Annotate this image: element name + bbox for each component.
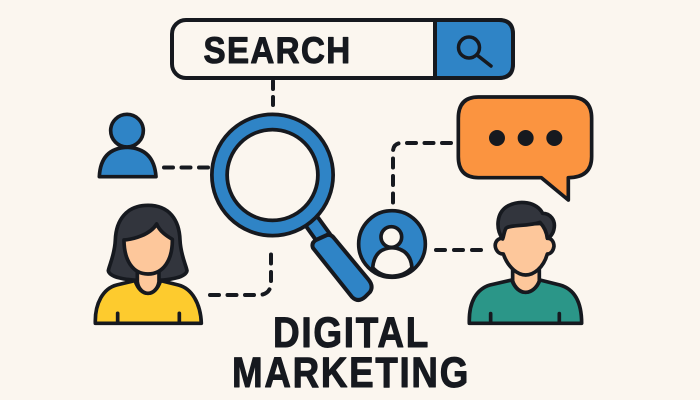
shirt: [95, 281, 201, 323]
man shirt seams: [491, 314, 559, 322]
chat bubble: [458, 97, 592, 200]
magnifier handle: [312, 235, 372, 300]
connector: search bar to magnifier: [271, 81, 275, 110]
search label: SEARCH: [204, 30, 352, 71]
badge body: [373, 248, 412, 276]
icon: small user: [99, 114, 156, 177]
icon: small magnifier: [458, 37, 491, 66]
man hair: [498, 202, 554, 239]
user body: [99, 147, 156, 177]
man neck: [513, 265, 539, 292]
man shirt: [469, 280, 582, 323]
magnifier ring: [220, 122, 326, 228]
person: woman: [95, 205, 201, 323]
connector: chat bubble to profile badge: [393, 143, 451, 203]
connector: small user to magnifier: [164, 166, 210, 170]
title: digital marketing: [232, 309, 470, 397]
magnifier neck: [303, 212, 330, 243]
man face: [495, 223, 554, 275]
search button: [435, 20, 513, 78]
user head: [111, 114, 143, 147]
hair: [108, 205, 187, 281]
title line 2: MARKETING: [232, 349, 470, 397]
search bar: [172, 20, 513, 78]
face: [124, 224, 172, 274]
chat dots: [489, 130, 562, 146]
person: man: [469, 202, 582, 323]
connector: woman to magnifier: [210, 247, 271, 295]
shirt seams: [118, 313, 179, 323]
profile badge: [359, 211, 425, 277]
title line 1: DIGITAL: [273, 309, 430, 357]
profile badge and right side: [359, 97, 592, 323]
neck: [137, 270, 159, 293]
badge head: [381, 227, 402, 247]
icon: large magnifier: [220, 122, 372, 300]
search field: [172, 20, 513, 78]
badge circle: [359, 211, 425, 277]
connector: profile badge to man: [436, 248, 484, 252]
